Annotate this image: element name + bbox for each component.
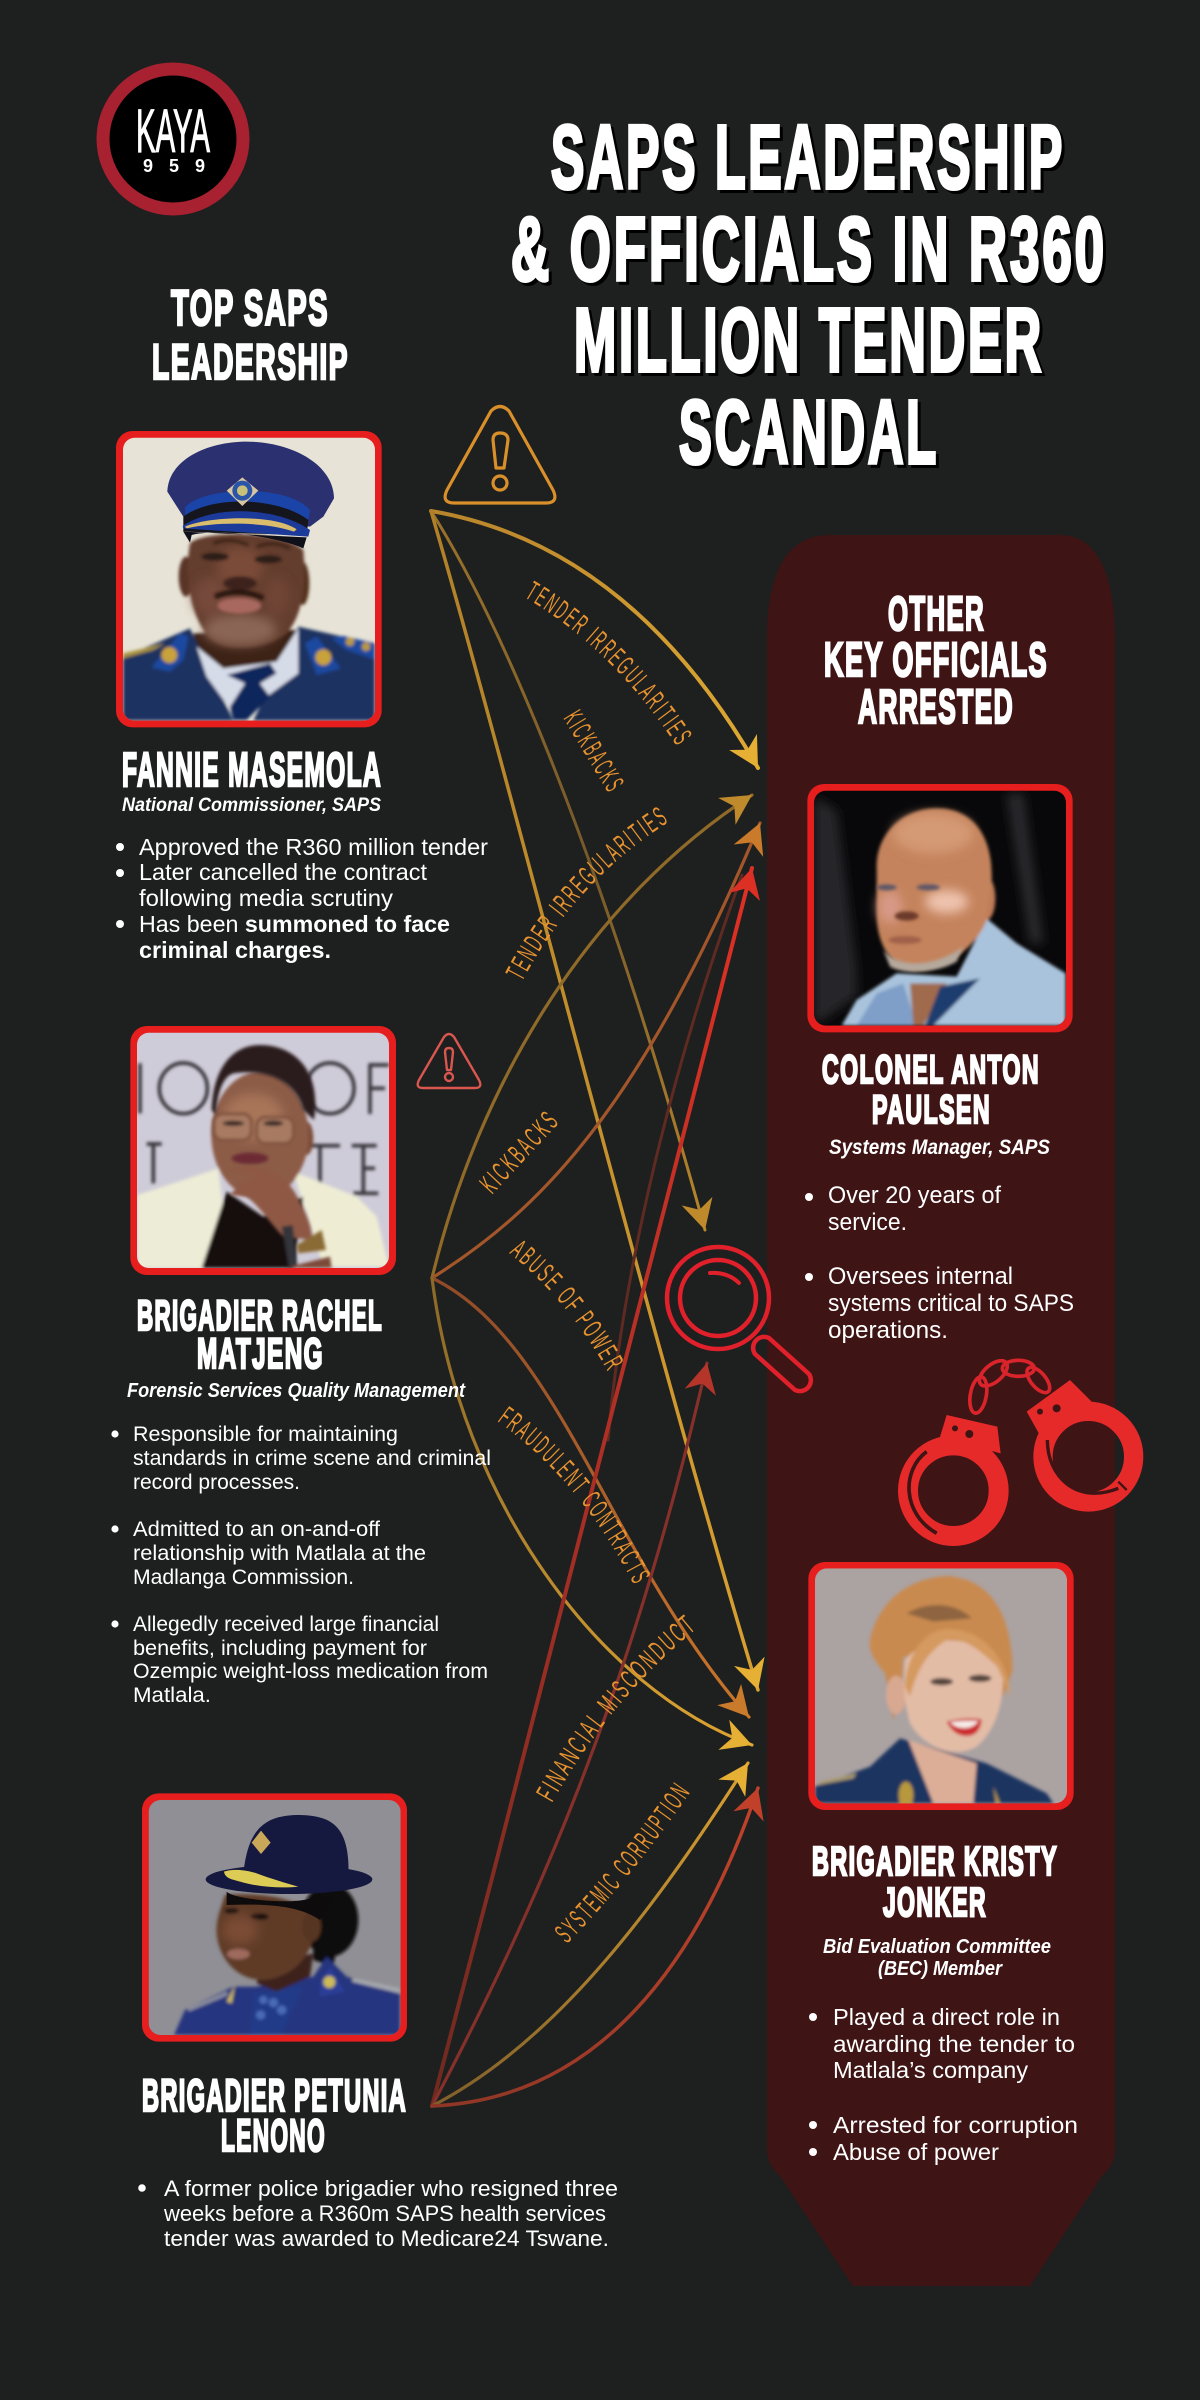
bullets: Fannie Masemola: Approved the R360 million tender <box>139 834 488 860</box>
bullets: Rachel Matjeng: Responsible for maintaining <box>133 1423 398 1446</box>
logo: Kaya 959 <box>103 69 243 209</box>
arrow: Lenono systemic corruption <box>432 1763 748 2106</box>
bullets: Rachel Matjeng: relationship with Matlala at the <box>133 1542 426 1565</box>
bullets: Kristy Jonker: Played a direct role in <box>833 2004 1060 2030</box>
heading: top SAPS leadership: LEADERSHIP <box>152 334 349 390</box>
label: financial misconduct: FINANCIAL MISCONDUCT <box>536 1614 694 1802</box>
bullets: Rachel Matjeng: record processes. <box>133 1471 300 1494</box>
bullets: Rachel Matjeng: Admitted to an on-and-off <box>133 1518 380 1541</box>
role: Rachel Matjeng: Forensic Services Quality Management <box>127 1380 466 1402</box>
heading: other key officials arrested: ARRESTED <box>858 681 1014 734</box>
role: Anton Paulsen: Systems Manager, SAPS <box>829 1136 1050 1159</box>
name: Anton Paulsen: PAULSEN <box>872 1088 991 1132</box>
name: Petunia Lenono: LENONO <box>221 2110 326 2161</box>
bullets: Anton Paulsen: Over 20 years of <box>828 1182 1001 1209</box>
label: tender irregularities 2: TENDER IRREGULARITIES <box>505 807 667 979</box>
heading: top SAPS leadership <box>152 280 349 390</box>
name: Kristy Jonker: JONKER <box>883 1879 987 1925</box>
name: Anton Paulsen: COLONEL ANTON <box>822 1048 1040 1092</box>
bullets: Fannie Masemola: following media scrutiny <box>139 885 394 911</box>
photo: Petunia Lenono <box>142 1793 407 2042</box>
arrow: Lenono red curve <box>432 1788 758 2106</box>
label: kickbacks 1: KICKBACKS <box>564 709 624 792</box>
bullets: Rachel Matjeng: standards in crime scene and criminal <box>133 1447 491 1470</box>
bullets: Rachel Matjeng: Matlala. <box>133 1684 211 1707</box>
bullets: Rachel Matjeng: benefits, including payment for <box>133 1637 427 1660</box>
bullets: Rachel Matjeng: Madlanga Commission. <box>133 1566 354 1589</box>
arrow: Matjeng fraudulent contracts <box>432 1278 752 1745</box>
label: kickbacks 2: KICKBACKS <box>478 1112 558 1194</box>
bullets: Petunia Lenono <box>138 2176 618 2251</box>
name: Kristy Jonker <box>812 1838 1058 1925</box>
photo: Anton Paulsen <box>807 784 1073 1032</box>
bullets: Anton Paulsen: Oversees internal <box>828 1263 1013 1290</box>
heading: other key officials arrested <box>824 588 1048 734</box>
icon: handcuffs <box>908 1356 1134 1536</box>
photo: Fannie Masemola <box>116 431 382 727</box>
bullets: Kristy Jonker: Arrested for corruption <box>833 2112 1078 2138</box>
bullets: Kristy Jonker: awarding the tender to <box>833 2031 1075 2057</box>
arrow: Lenono to Paulsen <box>432 868 752 2106</box>
bullets: Anton Paulsen: operations. <box>828 1317 948 1344</box>
arrow: Masemola long <box>431 511 758 1690</box>
label: fraudulent contracts: FRAUDULENT CONTRACTS <box>498 1406 650 1583</box>
logo: Kaya 959: 959 <box>143 156 205 176</box>
role: Kristy Jonker <box>823 1936 1051 1980</box>
heading: other key officials arrested: OTHER <box>888 588 985 641</box>
name: Anton Paulsen <box>822 1048 1040 1132</box>
arrow labels <box>478 580 694 1942</box>
bullets: Kristy Jonker <box>809 2004 1078 2165</box>
title: SCANDAL <box>679 383 939 483</box>
name: Fannie Masemola: FANNIE MASEMOLA <box>122 744 382 797</box>
bullets: Fannie Masemola <box>116 834 488 963</box>
bullets: Kristy Jonker: Matlala’s company <box>833 2057 1028 2083</box>
icon: large warning triangle <box>445 406 555 503</box>
name: Petunia Lenono <box>142 2070 407 2161</box>
arrow: Lenono to magnifier <box>432 1363 707 2106</box>
bullets: Rachel Matjeng <box>111 1423 491 1707</box>
bullets: Rachel Matjeng: Allegedly received large financial <box>133 1613 439 1636</box>
bullets: Petunia Lenono: A former police brigadier who resigned three <box>164 2176 618 2201</box>
role: Kristy Jonker: (BEC) Member <box>878 1958 1003 1980</box>
name: Petunia Lenono: BRIGADIER PETUNIA <box>142 2070 407 2121</box>
logo: Kaya 959: KAYA <box>136 97 210 165</box>
role: Kristy Jonker: Bid Evaluation Committee <box>823 1936 1051 1958</box>
bullets: Fannie Masemola: criminal charges. <box>139 937 331 963</box>
bullets: Anton Paulsen: systems critical to SAPS <box>828 1290 1074 1317</box>
arrow: Masemola tender irregularities <box>431 511 758 768</box>
arrow: Matjeng abuse of power <box>432 1278 749 1717</box>
bullets: Anton Paulsen: service. <box>828 1209 907 1236</box>
bullets: Anton Paulsen <box>805 1182 1074 1344</box>
name: Rachel Matjeng <box>137 1292 383 1378</box>
bullets: Fannie Masemola: Has been summoned to face <box>139 911 450 937</box>
name: Rachel Matjeng: MATJENG <box>197 1330 324 1378</box>
name: Rachel Matjeng: BRIGADIER RACHEL <box>137 1292 383 1340</box>
role: Fannie Masemola: National Commissioner, SAPS <box>122 795 381 816</box>
arrow: Matjeng tender irregularities <box>432 823 760 1278</box>
icon: magnifying glass <box>667 1247 811 1391</box>
bullets: Petunia Lenono: tender was awarded to Medicare24 Tswane. <box>164 2226 609 2251</box>
label: systemic corruption: SYSTEMIC CORRUPTION <box>555 1782 690 1942</box>
title <box>511 108 1107 483</box>
label: tender irregularities 1: TENDER IRREGULARITIES <box>527 580 692 744</box>
photo: Kristy Jonker <box>808 1562 1074 1810</box>
panel: other key officials <box>767 535 1115 2286</box>
heading: top SAPS leadership: TOP SAPS <box>171 280 329 336</box>
bullets: Petunia Lenono: weeks before a R360m SAPS health services <box>163 2201 606 2226</box>
arrow: Matjeng kickbacks <box>432 795 752 1278</box>
icon: small warning triangle <box>418 1034 480 1088</box>
arrow: Masemola kickbacks <box>431 511 705 1230</box>
bullets: Kristy Jonker: Abuse of power <box>833 2139 999 2165</box>
arrow: dim red upper line <box>608 875 742 1440</box>
bullets: Rachel Matjeng: Ozempic weight-loss medication from <box>133 1660 488 1683</box>
bullets: Fannie Masemola: Later cancelled the contract <box>139 859 428 885</box>
photo: Rachel Matjeng <box>130 1026 396 1275</box>
connecting arrows <box>431 511 760 2106</box>
label: abuse of power: ABUSE OF POWER <box>509 1240 623 1372</box>
